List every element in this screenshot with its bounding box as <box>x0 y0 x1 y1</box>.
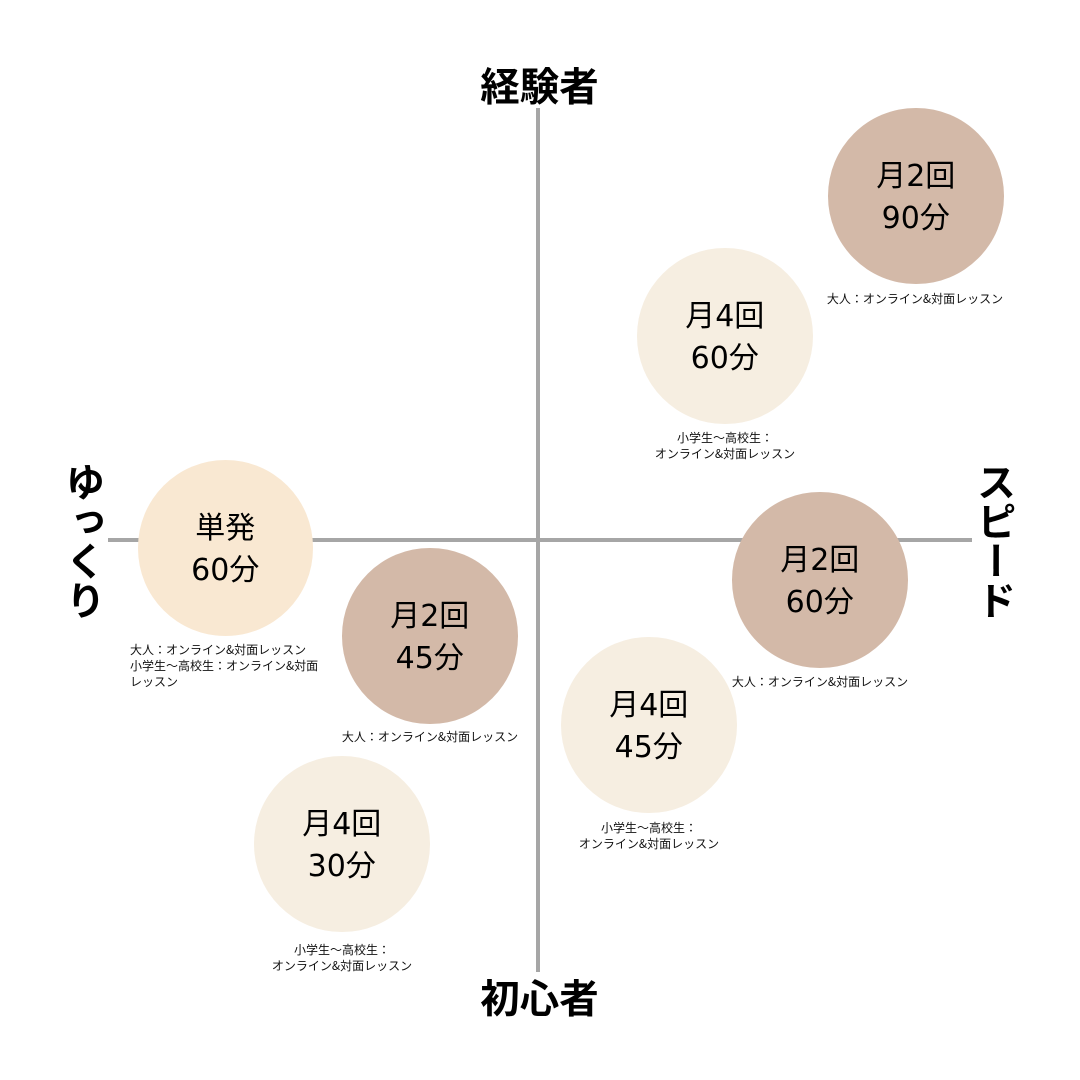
caption: 単発 60分: 大人：オンライン&対面レッスン <box>130 641 306 658</box>
circle: 単発 60分: 単発 <box>195 511 255 546</box>
caption: 月4回 45分: 小学生〜高校生： <box>601 819 697 836</box>
circle: 月2回 90分 <box>828 108 1004 284</box>
caption: 月4回 45分 <box>579 819 719 852</box>
caption: 月4回 60分: オンライン&対面レッスン <box>655 445 795 462</box>
vertical axis <box>536 108 540 972</box>
axis label: bottom: 初心者 <box>480 968 599 1025</box>
circle: 月4回 30分: 月4回 <box>302 807 381 842</box>
circle: 月2回 60分 <box>732 492 908 668</box>
axis label: right: スピード <box>968 462 1025 620</box>
caption: 単発 60分: 小学生〜高校生：オンライン&対面 <box>130 657 318 674</box>
circle: 月4回 45分: 月4回 <box>609 688 688 723</box>
axis label: left: ゆっくり <box>57 462 114 620</box>
circle: 月2回 60分: 月2回 <box>780 543 859 578</box>
axis label: top: 経験者 <box>480 56 599 113</box>
caption: 月4回 30分 <box>272 941 412 974</box>
circle: 月4回 60分 <box>637 248 812 424</box>
circle: 月4回 45分 <box>561 637 736 812</box>
circle: 月2回 90分: 月2回 <box>876 159 955 194</box>
caption: 月4回 30分: 小学生〜高校生： <box>294 941 390 958</box>
caption: 月2回 45分: 大人：オンライン&対面レッスン <box>342 728 518 745</box>
circle: 月2回 45分 <box>342 548 518 724</box>
caption: 月4回 60分: 小学生〜高校生： <box>677 429 773 446</box>
circle: 月4回 60分: 60分 <box>691 341 759 376</box>
caption: 月4回 30分: オンライン&対面レッスン <box>272 957 412 974</box>
caption: 月2回 90分: 大人：オンライン&対面レッスン <box>827 290 1003 307</box>
circle: 月2回 60分: 60分 <box>786 585 854 620</box>
circle: 月4回 30分: 30分 <box>308 849 376 884</box>
caption: 月4回 45分: オンライン&対面レッスン <box>579 835 719 852</box>
caption: 単発 60分: レッスン <box>130 673 178 690</box>
circle: 月2回 45分: 月2回 <box>390 599 469 634</box>
circle: 単発 60分 <box>138 460 313 636</box>
circle: 月2回 45分: 45分 <box>396 641 464 676</box>
circle: 単発 60分: 60分 <box>191 553 259 588</box>
caption: 月2回 60分: 大人：オンライン&対面レッスン <box>732 673 908 690</box>
circle: 月4回 60分: 月4回 <box>685 299 764 334</box>
circle: 月2回 90分: 90分 <box>882 201 950 236</box>
circle: 月4回 45分: 45分 <box>615 730 683 765</box>
caption: 月4回 60分 <box>655 429 795 462</box>
horizontal axis <box>108 538 972 542</box>
caption: 単発 60分 <box>130 641 318 690</box>
circle: 月4回 30分 <box>254 756 430 932</box>
